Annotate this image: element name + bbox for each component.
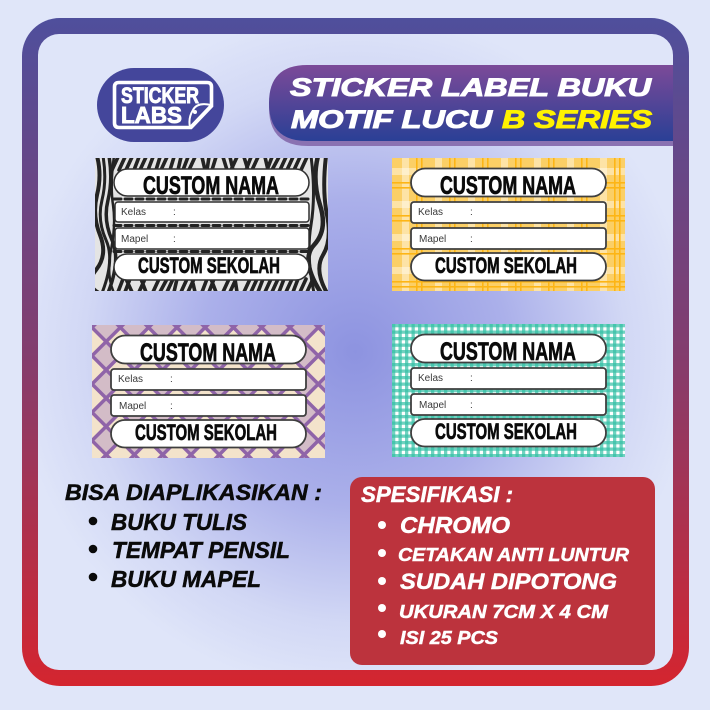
title banner xyxy=(269,65,673,146)
label: yellow plaid: : xyxy=(470,234,473,245)
title line 2: MOTIF LUCU xyxy=(291,106,493,134)
panel: specifications xyxy=(350,477,655,665)
applications heading: BISA DIAPLIKASIKAN : xyxy=(65,480,322,505)
label: purple argyle: : xyxy=(170,374,173,385)
label: purple argyle: CUSTOM SEKOLAH xyxy=(135,420,277,445)
label: zebra pattern: CUSTOM SEKOLAH xyxy=(138,253,280,278)
label: teal gingham: : xyxy=(470,400,473,411)
spec item: isi: ISI 25 PCS xyxy=(400,627,499,648)
label: teal gingham: : xyxy=(470,373,473,384)
spec item: chromo: CHROMO xyxy=(400,512,510,538)
label: yellow plaid xyxy=(392,158,625,291)
logo: Sticker Labs: LABS xyxy=(121,102,182,128)
label: purple argyle: Kelas xyxy=(118,374,143,385)
application item: buku mapel: BUKU MAPEL xyxy=(111,566,261,592)
label: teal gingham: Mapel xyxy=(419,400,446,411)
spec item: sudah dipotong: SUDAH DIPOTONG xyxy=(400,569,617,594)
spec item: cetakan anti luntur: CETAKAN ANTI LUNTUR xyxy=(398,544,630,565)
label: yellow plaid: Kelas xyxy=(418,207,443,218)
label: zebra pattern: Mapel xyxy=(121,234,148,245)
label: zebra pattern xyxy=(91,156,329,293)
title highlight: B SERIES xyxy=(502,106,652,134)
label: zebra pattern: CUSTOM NAMA xyxy=(143,172,279,200)
label: teal gingham: CUSTOM SEKOLAH xyxy=(435,419,577,444)
label: yellow plaid: CUSTOM SEKOLAH xyxy=(435,253,577,278)
label: purple argyle xyxy=(92,325,325,458)
label: yellow plaid: CUSTOM NAMA xyxy=(440,172,576,200)
label: yellow plaid: : xyxy=(470,207,473,218)
title line 1: STICKER LABEL BUKU xyxy=(290,74,652,102)
label: purple argyle: CUSTOM NAMA xyxy=(140,339,276,367)
spec item: ukuran: UKURAN 7CM X 4 CM xyxy=(399,601,609,622)
label: teal gingham: Kelas xyxy=(418,373,443,384)
application item: buku tulis: BUKU TULIS xyxy=(111,509,248,535)
label: purple argyle: Mapel xyxy=(119,401,146,412)
label: zebra pattern: Kelas xyxy=(121,207,146,218)
label: teal gingham xyxy=(392,324,625,457)
logo: Sticker Labs: STICKER xyxy=(121,83,199,108)
label: yellow plaid: Mapel xyxy=(419,234,446,245)
text block: applications xyxy=(65,480,322,592)
specifications heading: SPESIFIKASI : xyxy=(361,482,513,507)
label: zebra pattern: : xyxy=(173,234,176,245)
logo: Sticker Labs xyxy=(97,68,224,142)
label: teal gingham: CUSTOM NAMA xyxy=(440,338,576,366)
label: purple argyle: : xyxy=(170,401,173,412)
label: zebra pattern: : xyxy=(173,207,176,218)
application item: tempat pensil: TEMPAT PENSIL xyxy=(112,537,290,563)
